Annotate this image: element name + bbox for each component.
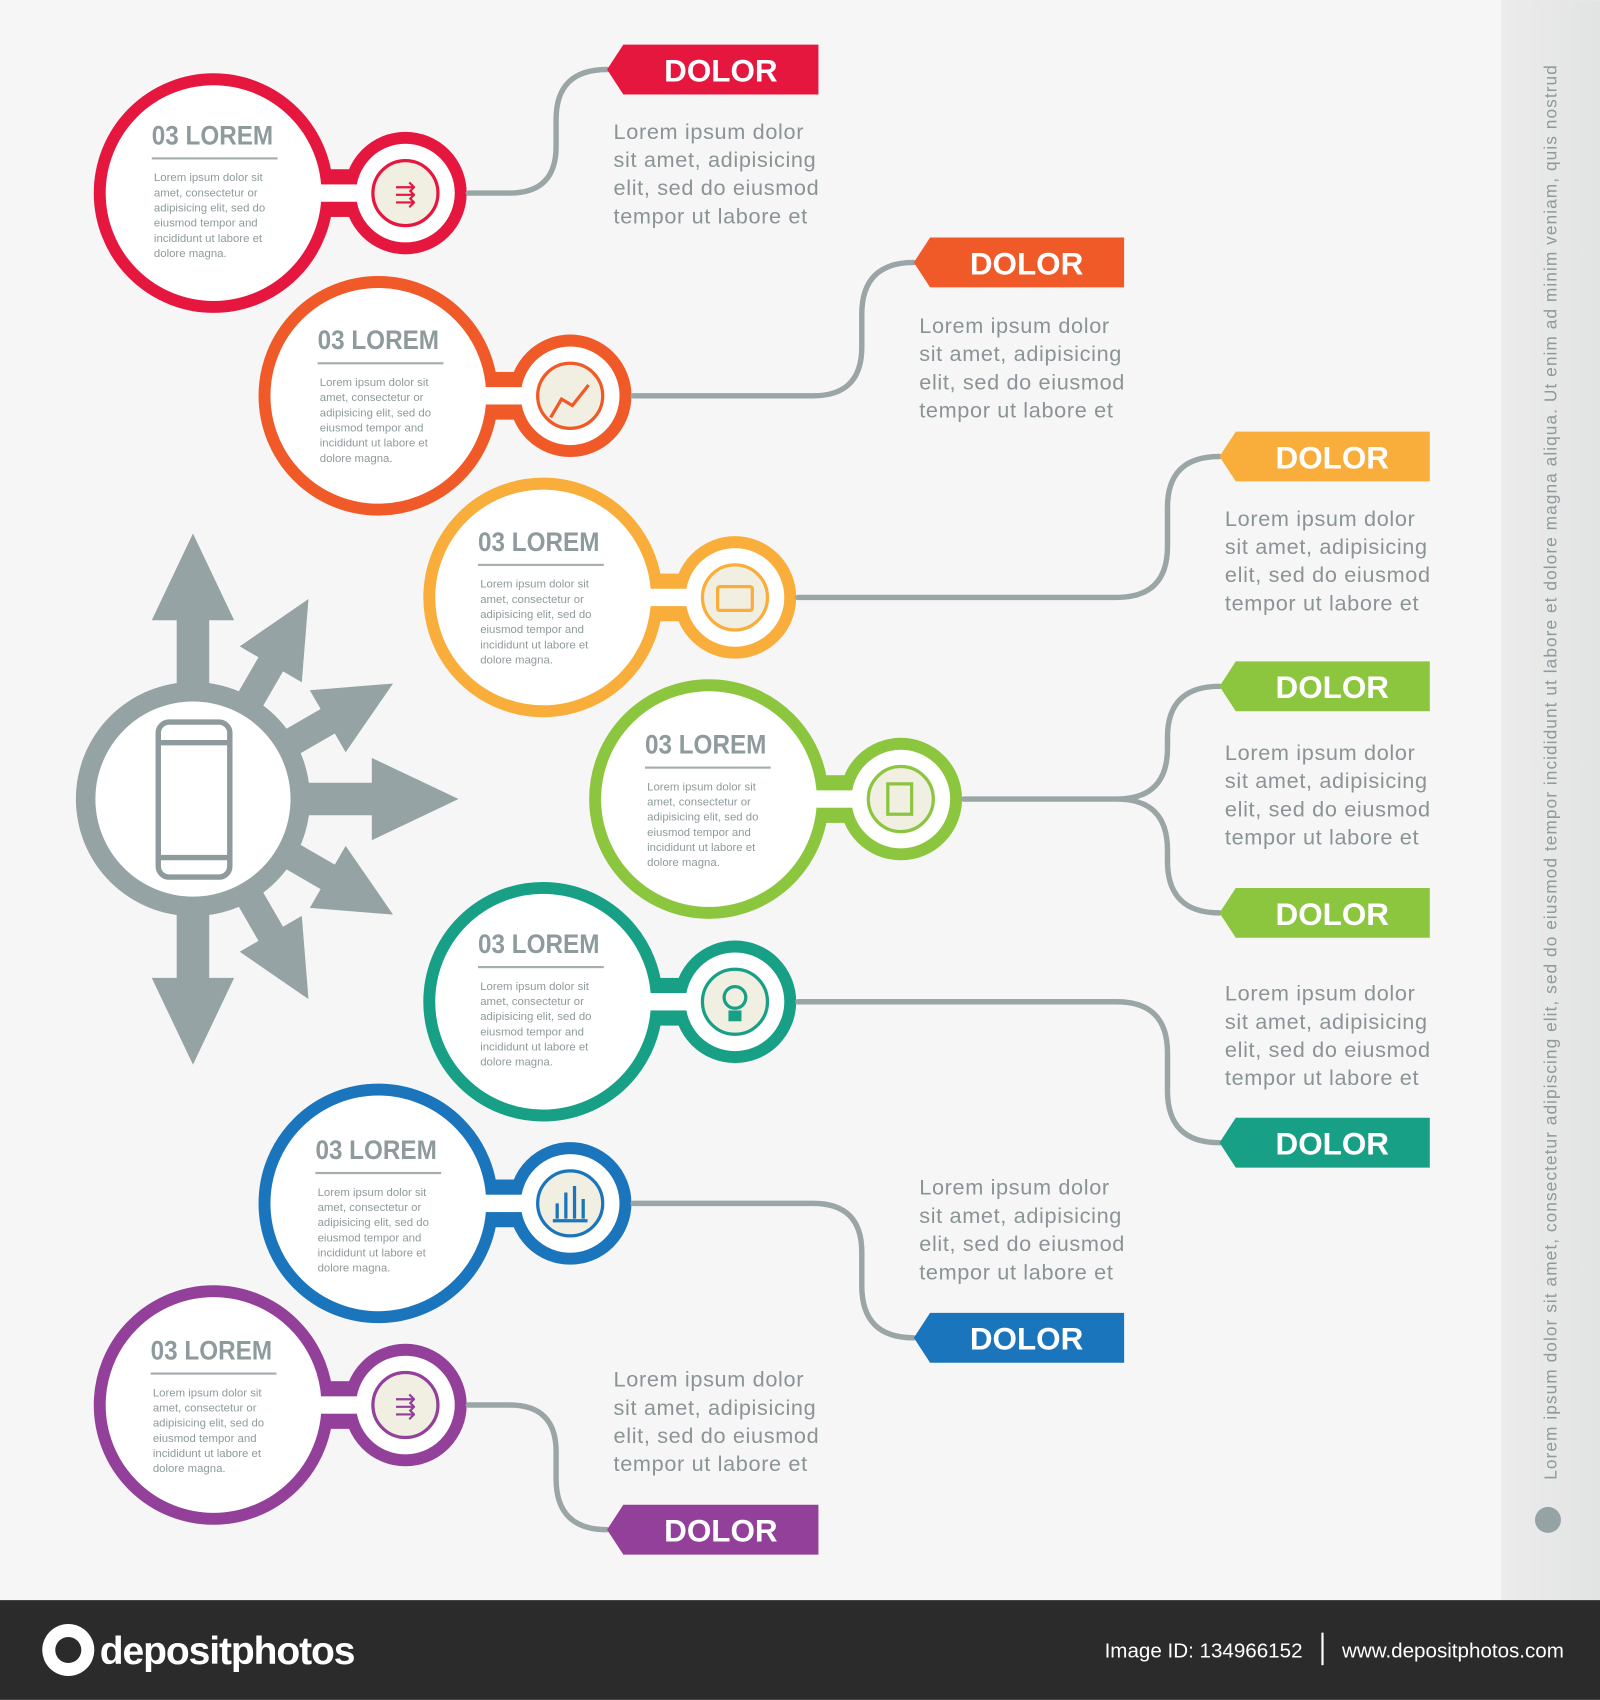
- text blocks: sit amet, adipisicing: [1225, 1009, 1428, 1034]
- node 2 orange: [264, 282, 625, 510]
- text blocks: sit amet, adipisicing: [1225, 534, 1428, 559]
- node 6 blue: [264, 1090, 625, 1317]
- node 4 green: 03 LOREM: [645, 729, 766, 760]
- tags: [607, 45, 1430, 1555]
- node 1 red: incididunt ut labore et: [154, 233, 263, 245]
- text blocks: sit amet, adipisicing: [919, 1203, 1122, 1228]
- node 3 yellow: 03 LOREM: [478, 526, 599, 557]
- node 7 purple: adipisicing elit, sed do: [153, 1418, 264, 1430]
- node 5 teal: amet, consectetur or: [480, 996, 584, 1008]
- node 4 green: incididunt ut labore et: [647, 842, 756, 854]
- node 3 yellow: adipisicing elit, sed do: [480, 609, 592, 621]
- node 3 yellow: Lorem ipsum dolor sit: [480, 579, 590, 591]
- footer bar: depositphotos: [100, 1630, 355, 1673]
- text blocks: elit, sed do eiusmod: [614, 175, 819, 200]
- node 1 red: [100, 79, 461, 307]
- node 6 blue: eiusmod tempor and: [318, 1232, 421, 1244]
- text blocks: [614, 119, 1431, 1476]
- text blocks: Lorem ipsum dolor: [1225, 740, 1415, 765]
- node 7 purple: ⇶: [395, 1391, 416, 1421]
- node 3 yellow: [429, 484, 790, 711]
- text blocks: elit, sed do eiusmod: [919, 1231, 1125, 1256]
- node 7 purple: incididunt ut labore et: [153, 1448, 262, 1460]
- hub: phone with arrows: [76, 533, 459, 1065]
- text blocks: Lorem ipsum dolor: [614, 119, 804, 144]
- node 5 teal: adipisicing elit, sed do: [480, 1011, 592, 1023]
- node 5 teal: Lorem ipsum dolor sit: [480, 981, 590, 993]
- text blocks: elit, sed do eiusmod: [919, 369, 1125, 394]
- node 4 green: dolore magna.: [647, 857, 720, 869]
- text blocks: elit, sed do eiusmod: [614, 1423, 819, 1448]
- node 4 green: [595, 685, 956, 913]
- text blocks: tempor ut labore et: [614, 203, 808, 228]
- node 2 orange: Lorem ipsum dolor sit: [320, 377, 429, 389]
- text blocks: elit, sed do eiusmod: [1225, 562, 1431, 587]
- node 1 red: amet, consectetur or: [154, 187, 258, 199]
- node 4 green: Lorem ipsum dolor sit: [647, 781, 757, 793]
- node 2 orange: eiusmod tempor and: [320, 423, 423, 435]
- icon: phone: [158, 722, 230, 877]
- node 3 yellow: amet, consectetur or: [480, 594, 584, 606]
- tags: DOLOR: [1276, 897, 1389, 932]
- text blocks: sit amet, adipisicing: [614, 1395, 816, 1420]
- text blocks: sit amet, adipisicing: [919, 341, 1122, 366]
- node 6 blue: Lorem ipsum dolor sit: [318, 1187, 427, 1199]
- footer bar: [0, 1600, 1600, 1700]
- node 6 blue: incididunt ut labore et: [318, 1248, 427, 1260]
- text blocks: tempor ut labore et: [919, 397, 1114, 422]
- node 2 orange: amet, consectetur or: [320, 392, 424, 404]
- node 6 blue: amet, consectetur or: [318, 1202, 422, 1214]
- node 3 yellow: incididunt ut labore et: [480, 639, 589, 651]
- node 1 red: adipisicing elit, sed do: [154, 203, 265, 215]
- text blocks: Lorem ipsum dolor: [919, 1175, 1110, 1200]
- text blocks: Lorem ipsum dolor: [1225, 506, 1415, 531]
- node 6 blue: dolore magna.: [318, 1263, 390, 1275]
- node 6 blue: 03 LOREM: [315, 1134, 437, 1165]
- node 7 purple: dolore magna.: [153, 1463, 226, 1475]
- node 7 purple: 03 LOREM: [151, 1334, 272, 1365]
- text blocks: tempor ut labore et: [1225, 590, 1419, 615]
- node 4 green: adipisicing elit, sed do: [647, 812, 758, 824]
- node 1 red: dolore magna.: [154, 248, 227, 260]
- text blocks: elit, sed do eiusmod: [1225, 796, 1431, 821]
- node 5 teal: eiusmod tempor and: [480, 1026, 584, 1038]
- right side panel: Lorem ipsum dolor sit amet, consectetur adipiscing elit, sed do eiusmod tempor incididunt ut labore et dolore magna aliqua. Ut enim ad minim veniam, quis nostrud: [1541, 65, 1561, 1480]
- node 3 yellow: eiusmod tempor and: [480, 624, 584, 636]
- node 4 green: eiusmod tempor and: [647, 827, 751, 839]
- node 3 yellow: dolore magna.: [480, 655, 553, 667]
- tags: DOLOR: [970, 1322, 1084, 1357]
- text blocks: tempor ut labore et: [614, 1451, 808, 1476]
- node 2 orange: dolore magna.: [320, 453, 393, 465]
- footer bar: www.depositphotos.com: [1341, 1640, 1564, 1663]
- node 5 teal: 03 LOREM: [478, 928, 599, 959]
- node 2 orange: adipisicing elit, sed do: [320, 407, 431, 419]
- tags: DOLOR: [970, 246, 1084, 281]
- text blocks: elit, sed do eiusmod: [1225, 1037, 1431, 1062]
- node 5 teal: incididunt ut labore et: [480, 1042, 589, 1054]
- text blocks: tempor ut labore et: [1225, 825, 1419, 850]
- node 1 red: Lorem ipsum dolor sit: [154, 172, 264, 184]
- node 1 red: ⇶: [395, 179, 416, 209]
- text blocks: Lorem ipsum dolor: [614, 1367, 804, 1392]
- tags: DOLOR: [1276, 670, 1389, 705]
- node 7 purple: eiusmod tempor and: [153, 1433, 257, 1445]
- node 5 teal: dolore magna.: [480, 1057, 553, 1069]
- node 2 orange: incididunt ut labore et: [320, 438, 429, 450]
- text blocks: sit amet, adipisicing: [614, 147, 816, 172]
- connector lines: [468, 70, 1220, 1530]
- node 7 purple: amet, consectetur or: [153, 1403, 257, 1415]
- text blocks: Lorem ipsum dolor: [919, 313, 1110, 338]
- tags: DOLOR: [664, 1514, 778, 1549]
- node 1 red: eiusmod tempor and: [154, 218, 258, 230]
- node 6 blue: adipisicing elit, sed do: [318, 1217, 429, 1229]
- node 1 red: 03 LOREM: [152, 119, 273, 150]
- text blocks: Lorem ipsum dolor: [1225, 981, 1415, 1006]
- node 2 orange: 03 LOREM: [318, 324, 439, 355]
- node 5 teal: [429, 888, 790, 1116]
- right side panel: [1501, 0, 1600, 1600]
- text blocks: sit amet, adipisicing: [1225, 768, 1428, 793]
- footer bar: Image ID: 134966152: [1105, 1640, 1303, 1663]
- text blocks: tempor ut labore et: [1225, 1065, 1419, 1090]
- text blocks: tempor ut labore et: [919, 1259, 1114, 1284]
- tags: DOLOR: [1276, 440, 1389, 475]
- tags: DOLOR: [1276, 1127, 1389, 1162]
- node 4 green: amet, consectetur or: [647, 797, 751, 809]
- tags: DOLOR: [664, 53, 778, 88]
- node 7 purple: Lorem ipsum dolor sit: [153, 1387, 262, 1399]
- node 7 purple: [100, 1291, 461, 1519]
